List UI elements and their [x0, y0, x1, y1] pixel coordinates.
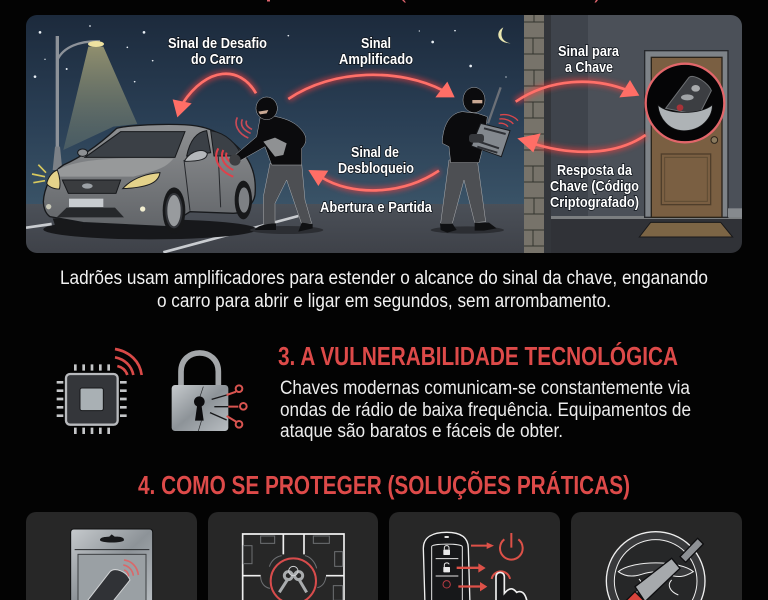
stars and moon [34, 25, 511, 82]
title fragment [267, 0, 598, 2]
panel: relay attack scene [26, 15, 743, 254]
signal waves at car [216, 117, 252, 177]
label: signal to key: a Chave [565, 59, 613, 76]
road markings [26, 216, 298, 252]
heading: section 4: 4. COMO SE PROTEGER (SOLUÇÕES PRÁTICAS) [138, 470, 630, 500]
label: unlock signal: Desbloqueio [338, 160, 414, 177]
thief two with amplifier [431, 87, 518, 234]
explanation text: o carro para abrir e ligar em segundos, sem arrombamento. [157, 291, 611, 312]
thief one [229, 97, 323, 234]
explanation text [60, 268, 708, 312]
street lamp [53, 36, 137, 170]
house wall [588, 15, 742, 216]
panel: faraday pouch [26, 512, 197, 600]
arrow: unlock signal [308, 170, 439, 190]
body: section 3: ataque são baratos e fáceis de obter. [280, 421, 563, 442]
panel: disable key signal [389, 512, 560, 600]
arrow: signal to key [516, 80, 639, 102]
door [639, 51, 743, 237]
arrow: challenge signal [173, 74, 256, 117]
icon: key fob with arrows and power button [423, 532, 527, 600]
icon: cracked padlock [172, 353, 247, 431]
key in bowl callout [646, 64, 724, 142]
label: key response: Chave (Código [550, 178, 639, 195]
heading: section 3: 3. A VULNERABILIDADE TECNOLÓGICA [278, 341, 678, 371]
label: challenge signal [168, 36, 268, 65]
body: section 3 [280, 378, 691, 442]
icon: floor plan with keys [243, 534, 344, 600]
body: section 3: ondas de rádio de baixa frequência. Equipamentos de [280, 400, 691, 421]
car [32, 124, 257, 239]
brick wall [524, 15, 551, 253]
explanation text: Ladrões usam amplificadores para estender o alcance do sinal da chave, enganando [60, 268, 708, 289]
label: signal to key [558, 44, 620, 73]
label: challenge signal: do Carro [191, 51, 243, 68]
label: challenge signal: Sinal de Desafio [168, 35, 267, 52]
icon: steering wheel with lock bar [606, 532, 705, 600]
arrow: key response [517, 133, 646, 152]
label: amplified signal [339, 35, 413, 68]
night sky [26, 15, 524, 205]
label: amplified signal: Amplificado [339, 51, 413, 68]
label: key response [550, 162, 639, 211]
icon: pouch with key [71, 529, 153, 600]
arrow: amplified signal [288, 75, 455, 99]
body: section 3: Chaves modernas comunicam-se constantemente via [280, 378, 690, 399]
label: signal to key: Sinal para [558, 43, 620, 60]
label: key response: Criptografado) [550, 194, 639, 211]
label: unlock signal [338, 144, 414, 177]
panel: keep keys away from doors [208, 512, 378, 600]
label: amplified signal: Sinal [361, 35, 391, 52]
label: key response: Resposta da [557, 162, 633, 179]
section 3 text [278, 341, 691, 442]
icon: microchip with signal [57, 349, 142, 434]
panel: steering wheel lock [571, 512, 742, 600]
label: unlock signal: Sinal de [351, 144, 399, 161]
street ground [26, 204, 524, 254]
label: open and start: Abertura e Partida [320, 199, 433, 216]
